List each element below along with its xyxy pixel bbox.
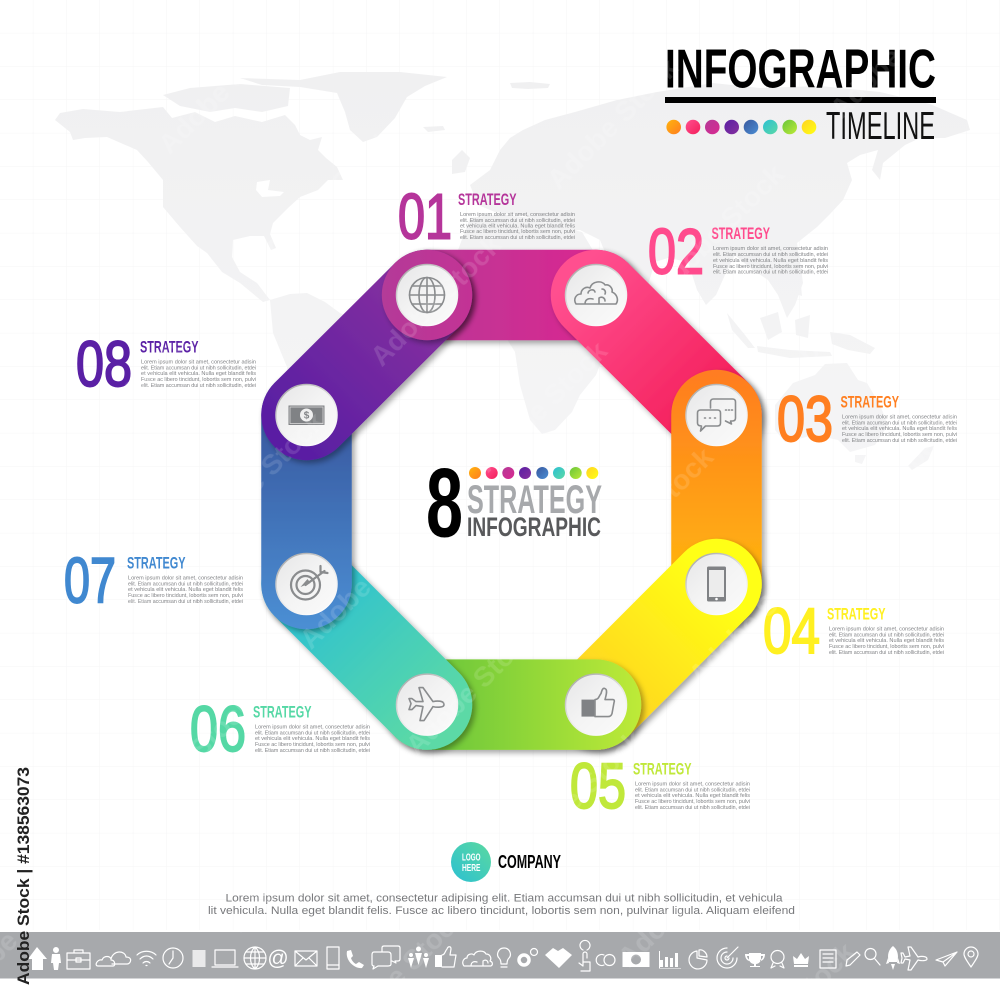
body text 04: et vehicula elit vehicula. Nulla eget blandit felis (829, 638, 944, 644)
body text 07: et vehicula elit vehicula. Nulla eget blandit felis (128, 587, 243, 593)
step 05 label (570, 750, 750, 822)
centre heading (426, 448, 602, 558)
step 02 label (648, 216, 828, 288)
company name: COMPANY (498, 852, 561, 872)
step 07 label (64, 544, 243, 616)
icon: airplane (396, 674, 458, 735)
body text 01 (460, 212, 575, 241)
heading 07: STRATEGY (127, 554, 186, 572)
number 07: 07 (64, 544, 116, 616)
step 04 label (763, 595, 944, 667)
body text 05: elit. Etiam accumsan dui ut nibh sollicitudin, etdei (635, 805, 750, 811)
icon: banknote (276, 384, 337, 446)
icon: target with arrow (276, 554, 337, 614)
icon: target with arrow (717, 947, 738, 968)
logo text: LOGO (462, 852, 480, 864)
icon: brain (566, 264, 626, 326)
icon: thumbs up (566, 674, 626, 735)
body text 02: et vehicula elit vehicula. Nulla eget blandit felis (713, 258, 828, 264)
footer paragraph (208, 892, 795, 917)
band 2 (596, 295, 716, 415)
band 7 (261, 415, 352, 584)
body text 05: et vehicula elit vehicula. Nulla eget blandit felis (635, 793, 750, 799)
body text 06: et vehicula elit vehicula. Nulla eget blandit felis (255, 736, 370, 742)
icon: banknote: $ (304, 410, 310, 422)
icon: at sign: @ (267, 947, 289, 970)
icon: wifi (137, 951, 156, 966)
body text 02: elit. Etiam accumsan dui ut nibh sollicitudin, etdei (713, 270, 828, 276)
number 06: 06 (190, 693, 246, 765)
icon: gears (519, 948, 538, 965)
logo circle (451, 842, 491, 882)
band 3 (671, 415, 762, 584)
body text 08: Lorem ipsum dolor sit amet, consectetur adisin (141, 360, 256, 366)
icon: envelope (295, 951, 317, 966)
heading 04: STRATEGY (827, 604, 886, 624)
title colour dots (666, 120, 816, 134)
body text 07: elit. Etiam accumsan dui ut nibh sollicitudin, etdei (128, 582, 243, 588)
band 8 (306, 295, 427, 415)
footer paragraph: Lorem ipsum dolor sit amet, consectetur adipising elit. Etiam accumsan dui ut nibh sollicitudin, et vehicula (226, 892, 783, 904)
octagon ring of eight bands (276, 250, 747, 735)
body text 08: Fusce ac libero tincidunt, lobortis sem non, pulvi (141, 377, 256, 383)
body text 08 (141, 360, 256, 389)
icon: thumbs up (435, 947, 456, 967)
step 06 label (190, 693, 370, 765)
band 1 (427, 250, 596, 340)
company logo block (451, 842, 561, 882)
body text 08: et vehicula elit vehicula. Nulla eget blandit felis (141, 371, 256, 377)
icon: airplane (901, 947, 927, 970)
body text 04: elit. Etiam accumsan dui ut nibh sollicitudin, etdei (829, 650, 944, 656)
body text 02: elit. Etiam accumsan dui ut nibh sollicitudin, etdei (713, 252, 828, 258)
icon: location pin (964, 947, 978, 967)
heading 01: STRATEGY (458, 190, 517, 209)
body text 01: et vehicula elit vehicula. Nulla eget blandit felis (460, 224, 575, 230)
heading 05: STRATEGY (633, 760, 692, 778)
body text 07: Fusce ac libero tincidunt, lobortis sem non, pulvi (128, 593, 243, 599)
step 03 label (777, 383, 957, 455)
great lakes cut-outs (256, 180, 284, 197)
body text 08: elit. Etiam accumsan dui ut nibh sollicitudin, etdei (141, 383, 256, 389)
number 01: 01 (398, 180, 452, 252)
body text 06 (255, 724, 370, 754)
band 6 (306, 584, 427, 705)
icon: pencil (846, 952, 860, 966)
body text 06: elit. Etiam accumsan dui ut nibh sollicitudin, etdei (255, 748, 370, 754)
number 05: 05 (570, 750, 626, 822)
heading 02: STRATEGY (712, 224, 770, 243)
body text 05: Fusce ac libero tincidunt, lobortis sem non, pulvi (635, 799, 750, 805)
icon: banknote (622, 952, 650, 967)
icon: light bulb (498, 948, 510, 967)
body text 02 (713, 246, 828, 276)
body text 06: elit. Etiam accumsan dui ut nibh sollicitudin, etdei (255, 730, 370, 736)
icon: clock (163, 948, 183, 968)
body text 06: Lorem ipsum dolor sit amet, consectetur adisin (255, 724, 370, 730)
body text 02: Fusce ac libero tincidunt, lobortis sem non, pulvi (713, 264, 828, 270)
icon: notebook (820, 950, 836, 968)
logo text (462, 852, 480, 874)
icon: brain (463, 951, 492, 966)
icon: globe (244, 947, 266, 969)
logo text: HERE (462, 862, 480, 874)
icon: magnifier (865, 948, 880, 965)
body text 07: Lorem ipsum dolor sit amet, consectetur adisin (128, 576, 243, 582)
body text 03: elit. Etiam accumsan dui ut nibh sollicitudin, etdei (842, 438, 957, 444)
body text 05: elit. Etiam accumsan dui ut nibh sollicitudin, etdei (635, 788, 750, 794)
body text 07 (128, 576, 243, 605)
icon: people (408, 946, 429, 968)
centre colour dots (469, 467, 598, 479)
centre heading: STRATEGY: STRATEGY (467, 478, 602, 522)
number 02: 02 (648, 216, 704, 288)
body text 03: et vehicula elit vehicula. Nulla eget blandit felis (842, 426, 957, 432)
icon: handset (347, 950, 364, 968)
big number 8: 8 (426, 448, 463, 558)
icon: briefcase (67, 950, 90, 969)
icon: clouds (96, 952, 131, 966)
body text 01: Fusce ac libero tincidunt, lobortis sem non, pulvi (460, 229, 575, 235)
icon: touch finger (579, 940, 590, 971)
icon: speech bubbles (686, 384, 747, 446)
icon: globe (396, 264, 458, 326)
strip background (0, 932, 1000, 978)
body text 01: elit. Etiam accumsan dui ut nibh sollicitudin, etdei (460, 235, 575, 241)
body text 04: elit. Etiam accumsan dui ut nibh sollicitudin, etdei (829, 632, 944, 638)
heading 06: STRATEGY (253, 702, 312, 722)
heading 08: STRATEGY (140, 338, 199, 356)
icon: paper plane (936, 952, 957, 966)
icon: award rosette (771, 950, 784, 968)
body text 03: elit. Etiam accumsan dui ut nibh sollicitudin, etdei (842, 420, 957, 426)
body text 01: elit. Etiam accumsan dui ut nibh sollicitudin, etdei (460, 218, 575, 224)
number 08: 08 (76, 328, 132, 400)
body text 04: Lorem ipsum dolor sit amet, consectetur adisin (829, 626, 944, 632)
body text 04 (829, 626, 944, 656)
body text 03: Fusce ac libero tincidunt, lobortis sem non, pulvi (842, 432, 957, 438)
body text 06: Fusce ac libero tincidunt, lobortis sem non, pulvi (255, 742, 370, 748)
centre heading: INFOGRAPHIC: INFOGRAPHIC (467, 512, 601, 542)
body text 03 (842, 414, 957, 444)
number 04: 04 (763, 595, 820, 667)
step 08 label (76, 328, 256, 400)
icon strip (0, 932, 1000, 978)
icon: person (51, 947, 61, 970)
icon: speech bubbles (372, 946, 400, 969)
icon: smartphone (327, 947, 339, 969)
icon: handshake (545, 948, 572, 968)
footer paragraph: lit vehicula. Nulla eget blandit felis. Fusce ac libero tincidunt, lobortis sem non, pulvinar ligula. Aliquam eleifend (208, 905, 795, 917)
step 01 label (398, 180, 575, 252)
icon: bar chart (659, 951, 681, 968)
number 03: 03 (777, 383, 833, 455)
body text 07: elit. Etiam accumsan dui ut nibh sollicitudin, etdei (128, 599, 243, 605)
icon: crown (793, 953, 809, 967)
body text 04: Fusce ac libero tincidunt, lobortis sem non, pulvi (829, 644, 944, 650)
band 5 (427, 659, 596, 750)
body text 08: elit. Etiam accumsan dui ut nibh sollicitudin, etdei (141, 366, 256, 372)
world map background (55, 72, 970, 482)
icon: calculator (192, 950, 206, 967)
body text 01: Lorem ipsum dolor sit amet, consectetur adisin (460, 212, 575, 218)
icon: rocket (886, 946, 900, 970)
icon: coins (596, 954, 615, 966)
icon: trophy (745, 953, 765, 967)
body text 03: Lorem ipsum dolor sit amet, consectetur adisin (842, 414, 957, 420)
icon: pie chart (689, 950, 707, 969)
body text 02: Lorem ipsum dolor sit amet, consectetur adisin (713, 246, 828, 252)
icon: smartphone (686, 554, 747, 614)
title block (665, 38, 936, 148)
band 4 (596, 584, 716, 705)
body text 05: Lorem ipsum dolor sit amet, consectetur adisin (635, 782, 750, 788)
vertical stock id text: Adobe Stock | #138563073 (14, 767, 33, 985)
band 1 start cap (382, 250, 472, 340)
heading 03: STRATEGY (840, 392, 899, 412)
title rule (665, 97, 936, 103)
body text 05 (635, 782, 750, 811)
icon: house (28, 947, 47, 970)
icon: laptop (212, 950, 238, 967)
